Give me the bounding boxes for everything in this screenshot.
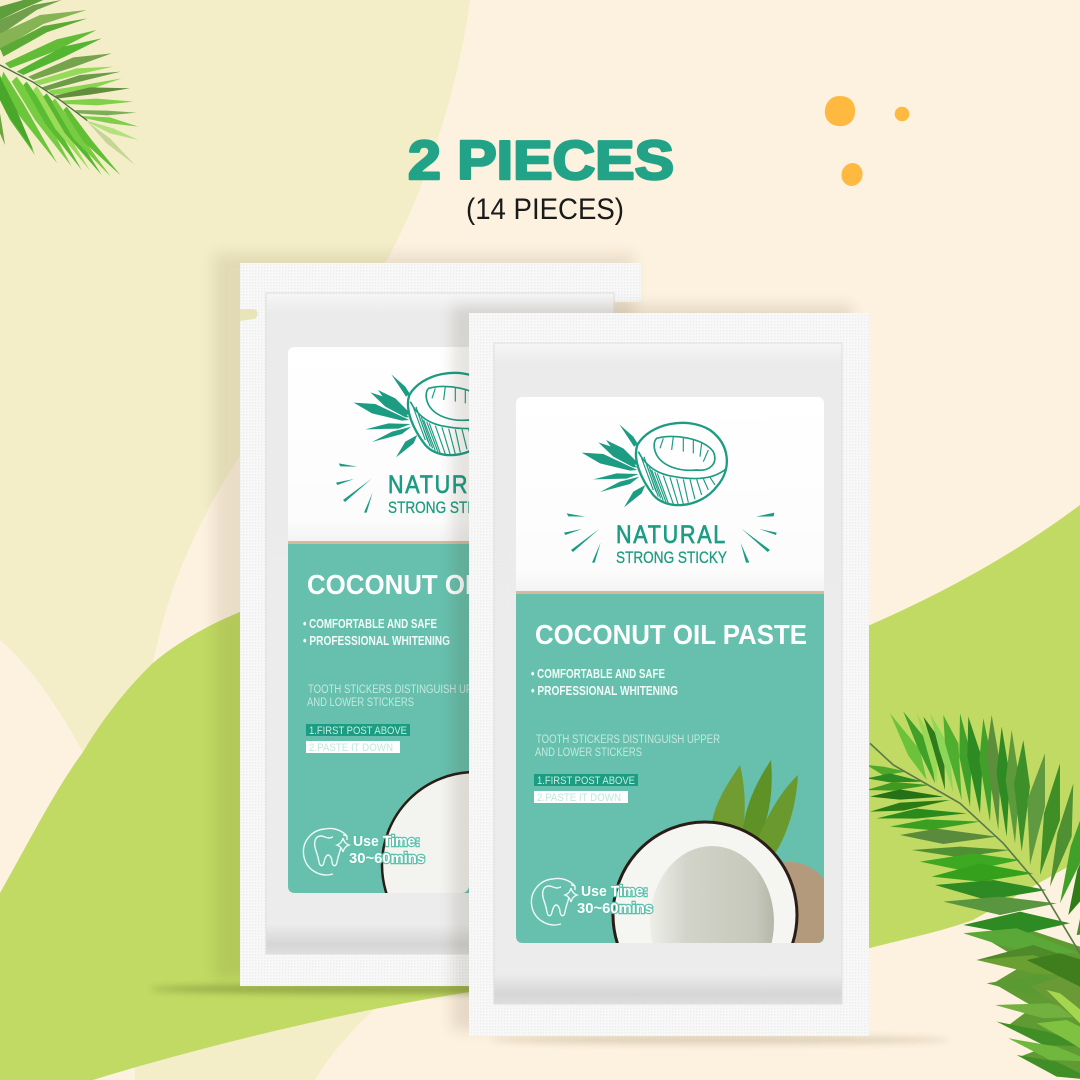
decorative orange dots <box>825 96 909 188</box>
back packet tan strip <box>288 541 488 545</box>
back packet wrapper <box>240 263 641 986</box>
front packet wrapper <box>469 313 869 1036</box>
front packet inner pouch <box>494 343 842 1004</box>
back packet logo <box>336 373 549 513</box>
back packet natural text: NATURAL <box>388 471 499 499</box>
subtitle: (14 PIECES) <box>466 193 624 226</box>
back packet strong sticky text: STRONG STICKY <box>388 498 499 517</box>
back packet step two: 2.PASTE IT DOWN <box>309 742 393 754</box>
back packet inner pouch <box>266 293 614 954</box>
front packet coconut photo <box>612 760 824 943</box>
front packet tan strip <box>516 591 824 595</box>
packet: front <box>469 313 869 1036</box>
background: green wave <box>0 505 1080 1080</box>
front packet teal panel <box>516 594 824 943</box>
front packet bullet two: • PROFESSIONAL WHITENING <box>531 683 678 698</box>
packet: back <box>240 263 641 986</box>
palm leaves behind coconut <box>712 760 798 852</box>
back packet description: TOOTH STICKERS DISTINGUISH UPPER <box>308 684 492 696</box>
back packet product name: COCONUT OIL PASTE <box>307 569 579 600</box>
back packet teal panel <box>288 544 490 893</box>
back packet use time: Use Time: <box>353 833 420 850</box>
back packet use time: 30~60mins <box>349 850 425 867</box>
front packet strong sticky text: STRONG STICKY <box>616 548 727 567</box>
back packet bullet one: • COMFORTABLE AND SAFE <box>303 616 437 631</box>
front packet tooth icon <box>531 878 577 925</box>
back packet description: AND LOWER STICKERS <box>307 697 414 709</box>
background: pale yellow shape <box>0 0 470 752</box>
front packet step one: 1.FIRST POST ABOVE <box>537 775 635 787</box>
back packet notch <box>240 309 258 321</box>
shadow: front packet floor <box>490 1036 950 1044</box>
front packet use time: 30~60mins <box>577 900 653 917</box>
front packet logo <box>564 423 777 563</box>
back packet white label <box>288 347 488 544</box>
back packet coconut photo <box>380 770 469 893</box>
coconut cavity <box>650 846 774 943</box>
front packet white label <box>516 397 824 594</box>
back packet tooth icon <box>303 828 349 875</box>
front packet product name: COCONUT OIL PASTE <box>535 619 807 650</box>
front packet description: AND LOWER STICKERS <box>535 747 642 759</box>
shadow: front packet on back packet <box>452 305 852 1030</box>
back packet step one: 1.FIRST POST ABOVE <box>309 725 407 737</box>
palm leaf: bottom right <box>867 712 1080 1080</box>
coconut half <box>612 820 798 943</box>
front packet natural text: NATURAL <box>616 521 727 549</box>
back packet bullet two: • PROFESSIONAL WHITENING <box>303 633 450 648</box>
front packet use time: Use Time: <box>581 883 648 900</box>
brown coconut shell <box>783 862 824 943</box>
shadow: back packet floor <box>150 984 690 994</box>
background: lower pale shape <box>135 1000 385 1080</box>
front packet bullet one: • COMFORTABLE AND SAFE <box>531 666 665 681</box>
palm leaf: top left <box>0 0 138 177</box>
front packet step two: 2.PASTE IT DOWN <box>537 792 621 804</box>
title: 2 PIECES <box>408 129 674 191</box>
front packet description: TOOTH STICKERS DISTINGUISH UPPER <box>536 734 720 746</box>
shadow: back packet <box>214 254 634 979</box>
